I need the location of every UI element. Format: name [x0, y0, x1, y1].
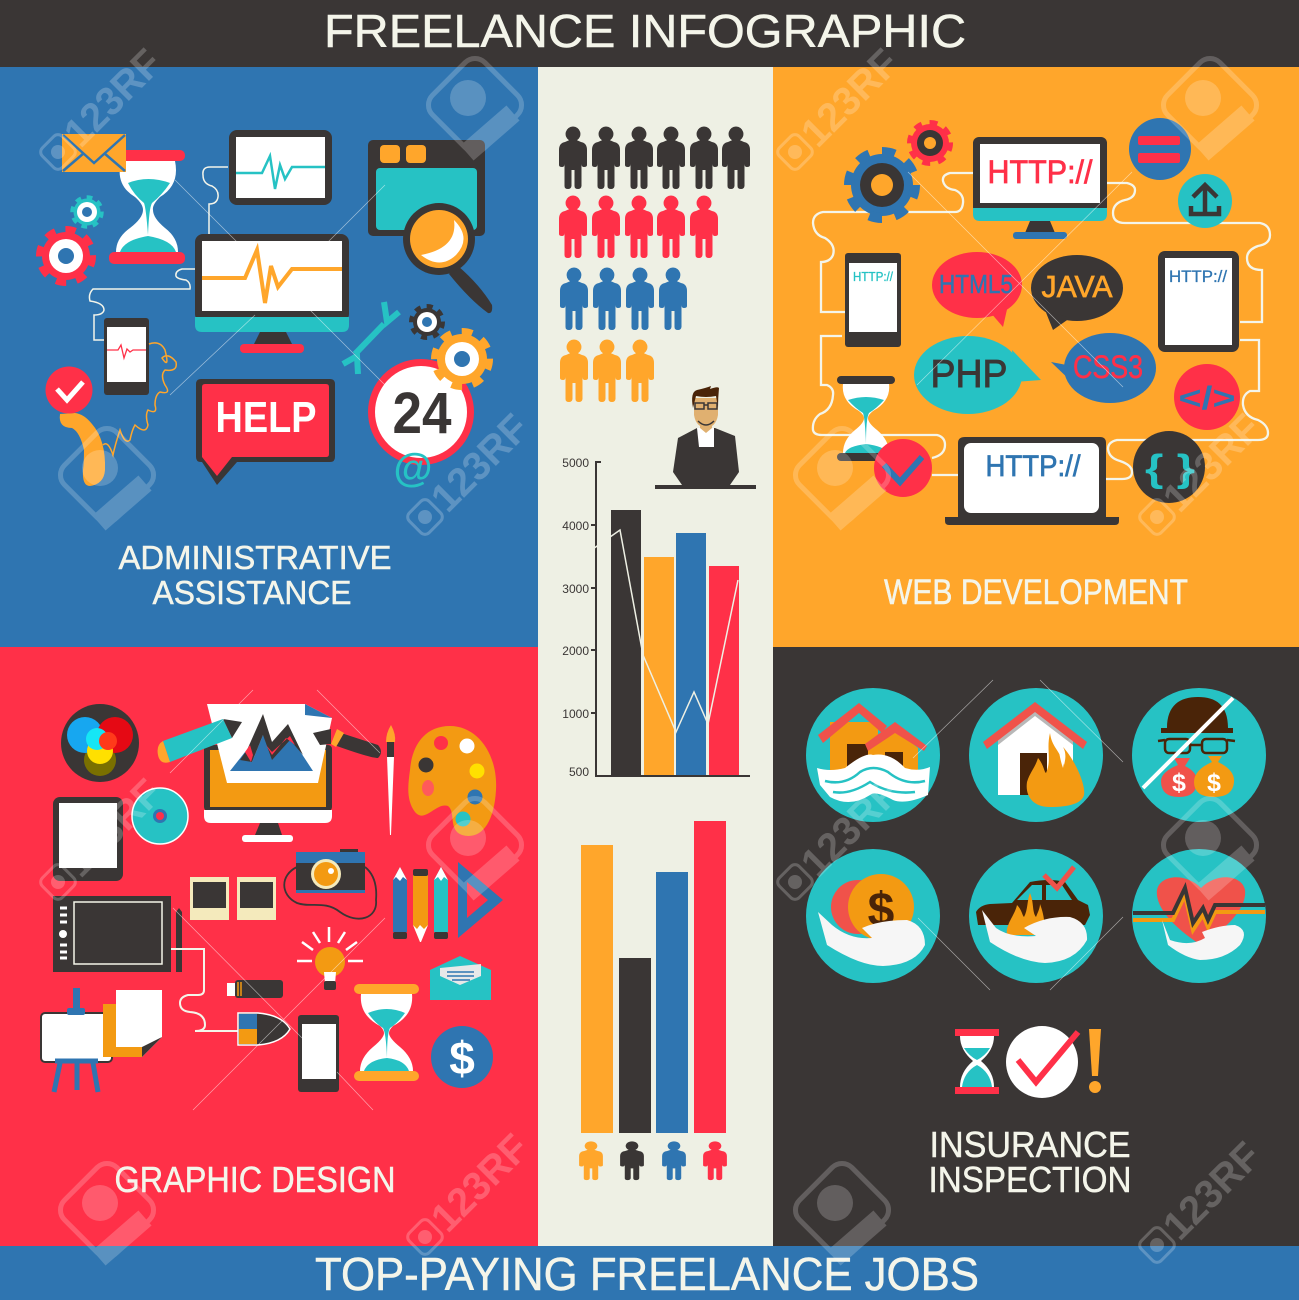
icon: drawing tablet: [53, 896, 182, 972]
icon: camera: [284, 849, 376, 919]
icon: flood insurance: [806, 688, 940, 822]
icon: fraud insurance: $: [1207, 769, 1221, 797]
icon: blue gear: [849, 152, 915, 218]
icon: tablet: [53, 797, 123, 881]
icon: code circle: </>: [1178, 380, 1236, 416]
icon: braces circle: [1133, 431, 1205, 503]
icon: palette: [408, 726, 496, 836]
panel: web development: [773, 67, 1299, 647]
icon: 24 hours badge: 24: [392, 381, 452, 446]
pictogram: orange people: [560, 340, 654, 402]
icon: http monitor: HTTP://: [988, 154, 1093, 190]
icon: fire insurance: [969, 688, 1103, 822]
icon: light bulb: [297, 927, 363, 990]
bubble: php: PHP: [930, 353, 1008, 396]
trend line: [590, 530, 738, 732]
panel heading: INSURANCE: [930, 1124, 1130, 1165]
icon: phone with cord: [103, 318, 176, 455]
icon: envelope: [62, 134, 126, 172]
icon: check circle: [874, 439, 932, 497]
icon: fraud insurance: $: [1172, 769, 1186, 797]
icon: usb stick: [227, 980, 283, 998]
axis labels: 1000: [562, 707, 589, 721]
icon: main monitor: [195, 234, 349, 353]
icon: upload circle: [1178, 174, 1232, 228]
connector lines: [89, 167, 228, 340]
bubble: java: JAVA: [1042, 269, 1113, 304]
connector lines: [813, 173, 1270, 479]
icon: equals circle: [1129, 118, 1191, 180]
panel: insurance inspection: [773, 647, 1299, 1246]
icon: orange gear: [435, 332, 489, 386]
pictogram: dark people: [559, 126, 750, 189]
icon: help speech bubble: [196, 379, 335, 485]
icon: cd disc: [132, 788, 188, 844]
icon: http laptop: [945, 437, 1119, 525]
icon: businessman at desk: [655, 386, 756, 489]
bubble: html5: HTML5: [939, 269, 1013, 299]
pictogram: red people: [559, 196, 718, 258]
icon: hourglass: [354, 984, 419, 1081]
bubble: java: [1031, 255, 1123, 330]
icon: envelope open: [430, 956, 491, 1000]
icon: telephone handset: [60, 413, 105, 486]
bubble: css3: [1051, 333, 1156, 403]
bar chart: lower: [579, 821, 727, 1180]
icon: triangle ruler: [458, 862, 503, 938]
icon: color circles: [61, 704, 139, 782]
icon: hourglass: [109, 150, 185, 264]
footer bar: [0, 1246, 1299, 1300]
title: FREELANCE INFOGRAPHIC: [324, 5, 966, 57]
icon: code circle: [1174, 364, 1240, 430]
panel heading: ASSISTANCE: [152, 574, 352, 611]
icon: help speech bubble: HELP: [216, 393, 316, 442]
cable: [171, 949, 238, 1031]
artwork sheet: [207, 704, 332, 783]
icon: braces circle: { }: [1145, 448, 1195, 490]
icon: red gear: [910, 123, 950, 163]
axis: [591, 462, 750, 776]
icon: tablet http: [1158, 251, 1239, 352]
icon: heart in hand: [1132, 849, 1266, 983]
icon: small teal gear: [72, 198, 102, 226]
bar people icons: [579, 1141, 727, 1180]
icon: exclamation: [1089, 1029, 1101, 1093]
panel heading: ADMINISTRATIVE: [118, 539, 392, 576]
bar chart: with axis: [562, 456, 750, 779]
icon: easel: [41, 988, 112, 1092]
bubble: css3: CSS3: [1073, 349, 1143, 385]
icon: http laptop: HTTP://: [986, 450, 1081, 483]
axis labels: 3000: [562, 582, 589, 596]
icon: hourglass: [955, 1029, 999, 1094]
icon: phone http: HTTP://: [853, 269, 893, 284]
axis labels: 4000: [562, 519, 589, 533]
panel: graphic design: [0, 647, 538, 1246]
panel heading: [928, 1124, 1132, 1200]
panel heading: [118, 539, 392, 611]
bars: [611, 510, 641, 775]
icon: hourglass: [837, 376, 895, 461]
icon: money in hand: [806, 849, 940, 983]
icon: small monitor: [229, 130, 332, 205]
icon: 24 hours badge: [368, 359, 474, 490]
panel: center column: [538, 67, 773, 1246]
icon: wrench: [343, 302, 399, 374]
axis labels: [562, 456, 589, 779]
icon: 24 hours badge: @: [393, 446, 433, 490]
axis labels: 2000: [562, 644, 589, 658]
axis labels: 500: [569, 765, 589, 779]
icon: dollar coin: $: [449, 1032, 475, 1084]
axis labels: 5000: [562, 456, 589, 470]
icon: fraud insurance: [1132, 688, 1266, 822]
icon: smartphone: [298, 1015, 339, 1092]
panel heading: INSPECTION: [928, 1159, 1132, 1200]
icon: http monitor: [973, 137, 1107, 239]
icon: pencils: [393, 867, 448, 942]
icon: money in hand: $: [868, 884, 895, 937]
pictogram: blue people: [560, 268, 687, 330]
icon: tablet http: HTTP://: [1169, 267, 1227, 286]
icon: browser with magnifier: [368, 140, 492, 313]
icon: check mark: [1006, 1026, 1078, 1098]
panel: administrative assistance: [0, 67, 538, 647]
icon: photo frames: [190, 877, 276, 920]
icon: fountain pen: [313, 729, 381, 758]
icon: dollar coin: [431, 1026, 493, 1088]
icon: red check circle: [46, 366, 92, 414]
icon: paper stack: [103, 990, 162, 1057]
header bar: [0, 0, 1299, 67]
icon: mouse: [238, 1013, 290, 1045]
icon: pencil: [158, 719, 242, 763]
footer title: TOP-PAYING FREELANCE JOBS: [315, 1248, 979, 1300]
icon: car fire in hand: [969, 849, 1103, 983]
icon: phone http: [845, 253, 901, 347]
panel heading: WEB DEVELOPMENT: [884, 573, 1188, 612]
bubble: html5: [932, 252, 1022, 327]
panel heading: GRAPHIC DESIGN: [114, 1159, 396, 1200]
icon: design monitor: [204, 704, 332, 842]
icon: small dark gear: [412, 306, 442, 338]
icon: paint brush: [386, 725, 395, 835]
bubble: php: [914, 336, 1041, 414]
icon: large red gear: [40, 230, 92, 282]
